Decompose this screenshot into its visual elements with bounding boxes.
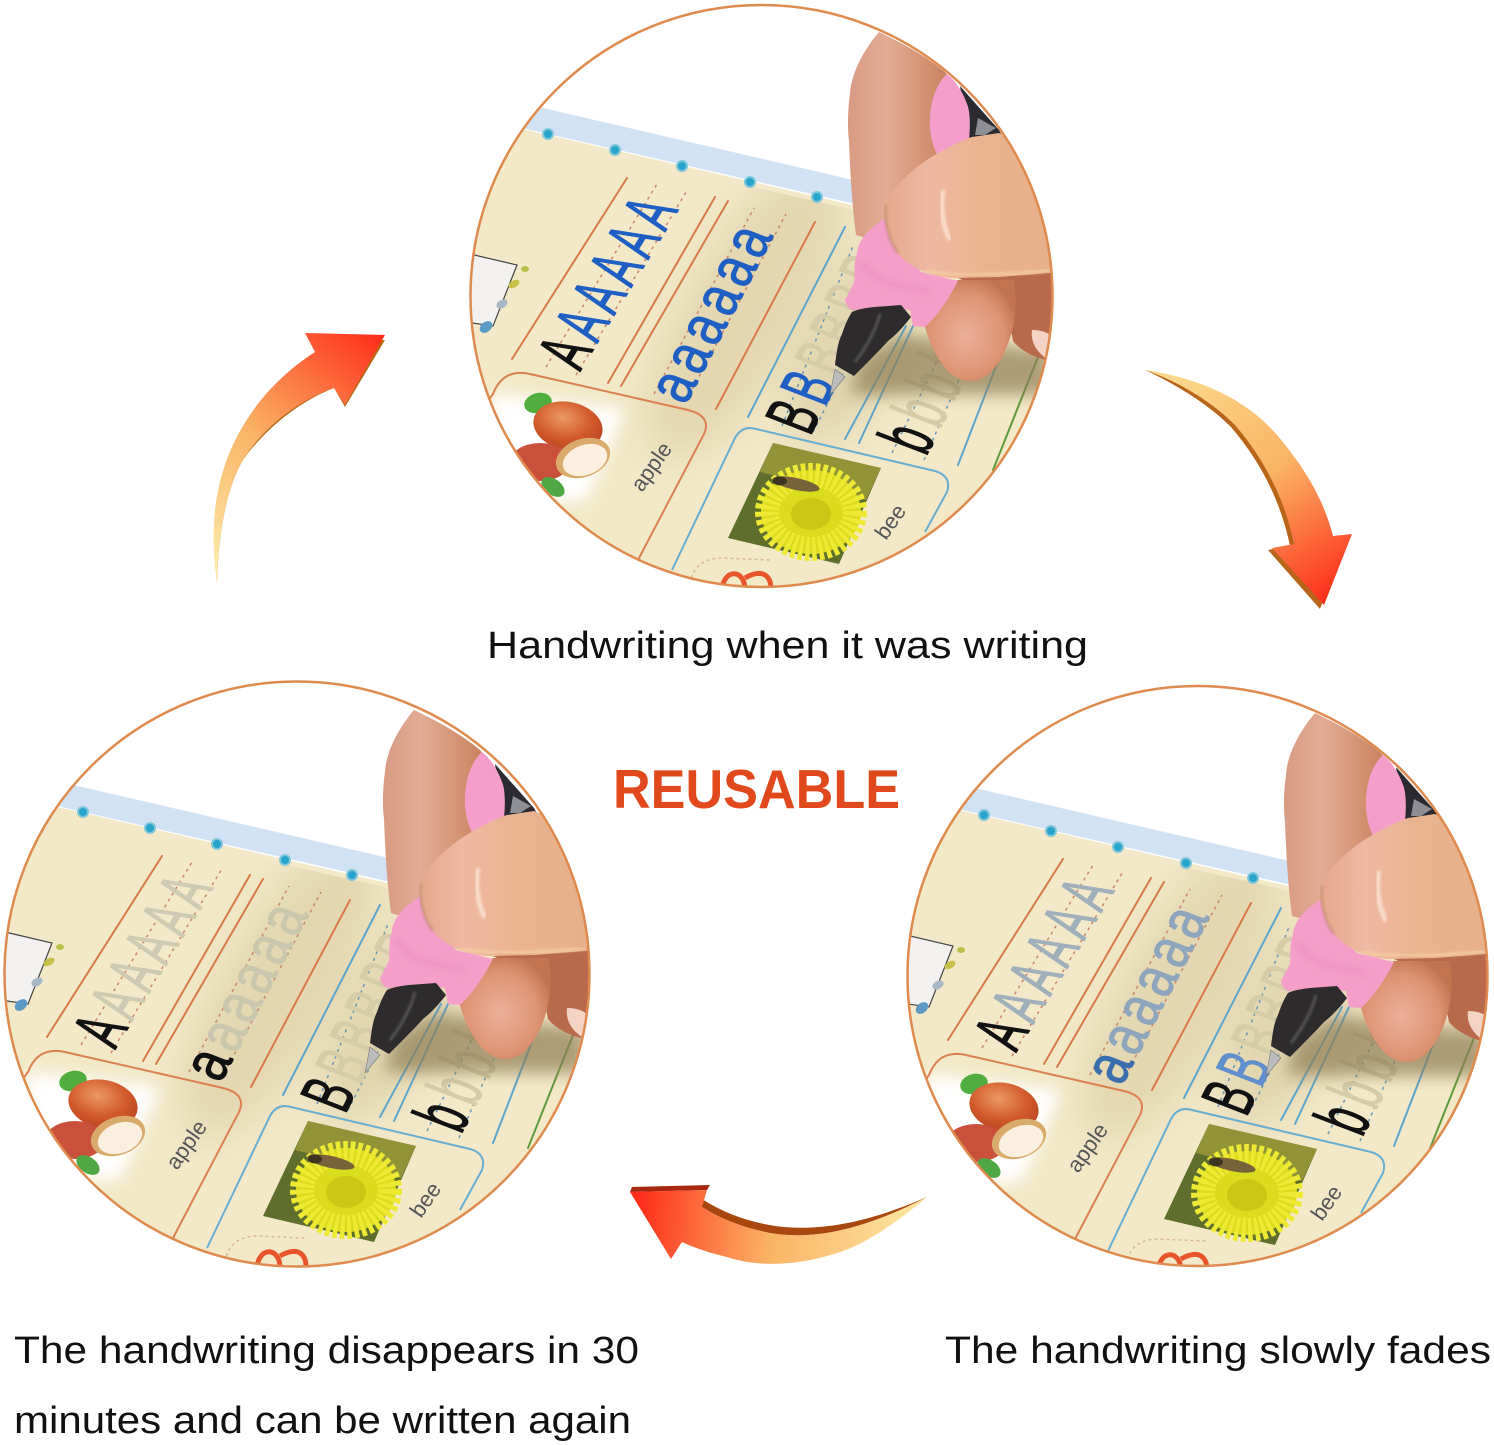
title: REUSABLE: REUSABLE [613,758,900,820]
label apple: apple [161,1115,212,1174]
traced letters B: BBBBBB [1186,920,1349,1124]
panel: top circle, handwriting while writing [469,4,1054,588]
traced letters a: aaaaaa [168,889,324,1089]
label bee: bee [870,499,911,544]
label apple: apple [626,437,677,496]
caption: left circle: minutes and can be written again [14,1400,631,1442]
hand holding pen [830,32,1060,395]
arrow: right circle to left circle [630,1185,927,1264]
traced letters a: aaaaaa [633,211,789,411]
panel: left circle, handwriting disappeared [3,680,591,1268]
caption: left circle: The handwriting disappears in 30 [14,1330,639,1372]
arrow: top circle to right circle [1145,370,1352,609]
hand holding pen [1266,713,1494,1076]
traced letters b: bbbbb [1298,979,1445,1144]
traced letters b: bbbbb [862,298,1009,463]
worksheet scene [909,713,1486,1265]
traced letters b: bbbbb [397,976,544,1141]
traced letters B: BBBBBB [750,239,913,443]
worksheet page [909,788,1479,1265]
traced letters A: AAAAAA [57,860,232,1056]
traced letters A: AAAAAA [958,863,1133,1059]
caption: top circle: Handwriting when it was writing [487,625,1088,667]
circle outline [908,686,1488,1266]
arrow: left circle to top circle [214,333,385,583]
hand holding pen [365,710,595,1073]
traced letters A: AAAAAA [522,182,697,378]
label apple: apple [1062,1118,1113,1177]
circle outline [4,682,590,1266]
circle outline [470,5,1052,587]
caption: right circle: The handwriting slowly fades [945,1330,1491,1372]
worksheet scene [6,710,588,1266]
worksheet page [6,786,581,1266]
worksheet page [472,108,1044,586]
label bee: bee [1306,1180,1347,1225]
panel: right circle, handwriting fading [906,684,1489,1268]
caption: left circle [14,1330,639,1442]
label bee: bee [405,1177,446,1222]
traced letters a: aaaaaa [1069,892,1225,1092]
traced letters B: BBBBBB [285,917,448,1121]
